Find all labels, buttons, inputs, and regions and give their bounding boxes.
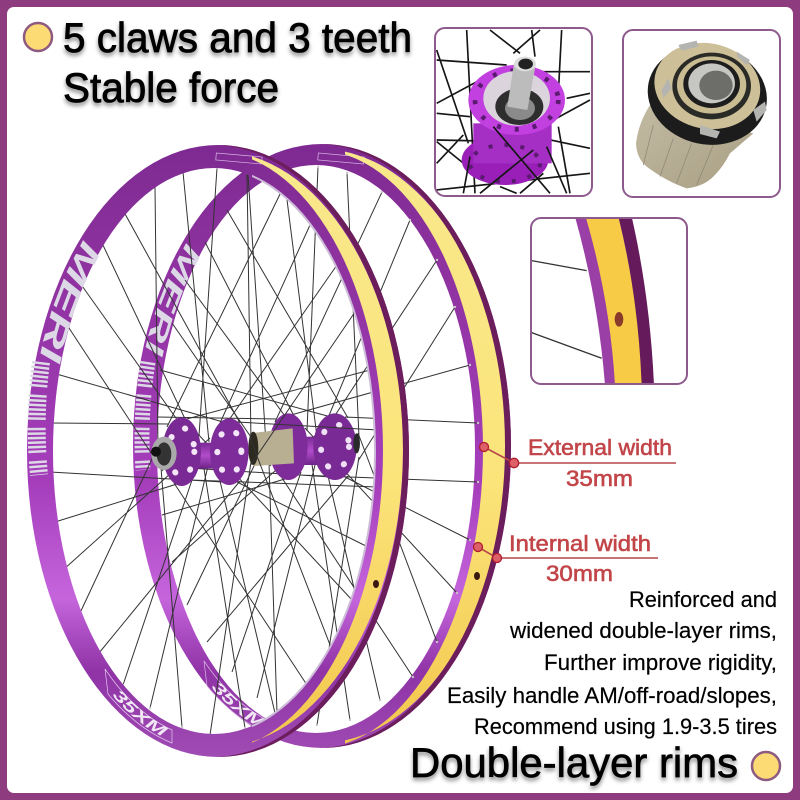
hub upper flange bbox=[468, 65, 565, 135]
freehub opening bbox=[248, 432, 258, 465]
front rim dark outer edge bbox=[220, 145, 409, 757]
front wheel spokes bbox=[50, 168, 378, 735]
rear wheel bbox=[133, 144, 511, 748]
hub close-up photo drawing bbox=[435, 28, 592, 196]
beige ring bbox=[646, 33, 768, 139]
rear spoke nipples bbox=[317, 167, 478, 725]
marker dots bbox=[480, 442, 488, 452]
value text: 30mm bbox=[546, 561, 613, 586]
value text: 35mm bbox=[566, 466, 633, 491]
front rim model mark: 35XM bbox=[113, 691, 168, 736]
label text: External width bbox=[528, 435, 672, 460]
front rim hatch stripes bbox=[37, 362, 41, 475]
panel: rim close-up bbox=[531, 217, 687, 385]
rear hub right flange bbox=[313, 413, 357, 480]
rear rim yellow inner band bbox=[345, 152, 505, 744]
description text block: Reinforced and bbox=[629, 587, 777, 612]
leader line bbox=[484, 447, 676, 463]
rear hub shell bbox=[302, 437, 322, 465]
lower flange holes bbox=[470, 145, 540, 182]
panel border bbox=[435, 28, 592, 196]
hub shell bbox=[473, 123, 552, 163]
heading: 5 claws and 3 teeth bbox=[63, 14, 412, 111]
front hub shell bbox=[195, 443, 217, 469]
close-up spokes bbox=[532, 261, 602, 358]
rear rim hatch stripes bbox=[142, 362, 148, 470]
heading: 5 claws and 3 teeth: 5 claws and 3 teeth bbox=[63, 14, 412, 61]
front hub right flange bbox=[210, 418, 249, 485]
panel: hub close-up bbox=[435, 28, 592, 196]
front rim logo text: MERI bbox=[40, 240, 99, 364]
icon: yellow bullet top bbox=[24, 23, 52, 51]
freehub tan body bbox=[636, 105, 753, 188]
icon: yellow bullet bottom bbox=[752, 752, 780, 780]
description text block: widened double-layer rims, bbox=[509, 618, 777, 643]
rear wheel rim face bbox=[133, 144, 511, 748]
callout: internal width bbox=[474, 531, 658, 586]
freehub drawing bbox=[636, 33, 776, 188]
label text: Internal width bbox=[509, 531, 651, 556]
panel border bbox=[623, 30, 780, 197]
heading: 5 claws and 3 teeth: Stable force bbox=[63, 64, 279, 111]
spokes behind hub bbox=[437, 30, 590, 193]
description text block: Easily handle AM/off-road/slopes, bbox=[447, 683, 777, 708]
axle bbox=[507, 63, 536, 110]
black outer ring bbox=[638, 34, 776, 156]
panel border bbox=[531, 218, 687, 384]
rear hub left flange bbox=[269, 413, 308, 480]
leader line bbox=[478, 547, 658, 558]
rear rim dark outer edge bbox=[325, 144, 511, 748]
front hub bbox=[151, 417, 249, 486]
close-up yellow band bbox=[586, 217, 643, 385]
rim close-up drawing bbox=[532, 219, 654, 383]
rear wheel spokes bbox=[157, 167, 478, 725]
front rim model mark bbox=[104, 668, 172, 744]
rear valve hole bbox=[474, 572, 480, 580]
front rim top mark bbox=[216, 153, 262, 164]
front hub axle end bbox=[151, 447, 161, 457]
callout: external width bbox=[480, 435, 676, 491]
close-up purple lip bbox=[575, 217, 617, 385]
rear rim top mark bbox=[318, 153, 364, 164]
spokes in front of hub bbox=[463, 127, 570, 193]
panel: freehub close-up bbox=[623, 30, 780, 197]
body groove lines bbox=[643, 125, 713, 185]
hub lower flange bbox=[462, 142, 548, 185]
front valve hole bbox=[373, 580, 379, 588]
rear hub bbox=[248, 413, 360, 480]
description text block bbox=[447, 587, 777, 739]
close-up dark edge bbox=[618, 217, 654, 385]
black inner ring bbox=[672, 53, 751, 119]
bearing bbox=[683, 60, 740, 108]
hub opening bbox=[483, 71, 550, 126]
marker dots bbox=[474, 542, 482, 552]
description text block: Recommend using 1.9-3.5 tires bbox=[474, 714, 777, 739]
rear hub axle end bbox=[353, 433, 360, 453]
front rim silver inner lip bbox=[252, 174, 376, 727]
rear rim model mark bbox=[204, 660, 265, 726]
pawls bbox=[662, 41, 767, 138]
front hub end cap bbox=[151, 437, 177, 470]
description text block: Further improve rigidity, bbox=[544, 650, 777, 675]
rear rim model mark: 35XM bbox=[212, 683, 264, 724]
front rim yellow inner band bbox=[252, 156, 403, 743]
freehub body on hub bbox=[250, 428, 294, 466]
heading: Double-layer rims: Double-layer rims bbox=[410, 739, 738, 786]
front hub left flange bbox=[162, 417, 201, 486]
bearing bbox=[495, 88, 543, 125]
front wheel rim face bbox=[27, 145, 409, 757]
close-up valve hole bbox=[615, 312, 623, 327]
front wheel bbox=[27, 145, 409, 757]
front spoke nipples bbox=[80, 168, 378, 735]
rear rim logo text: MERI bbox=[146, 243, 200, 358]
